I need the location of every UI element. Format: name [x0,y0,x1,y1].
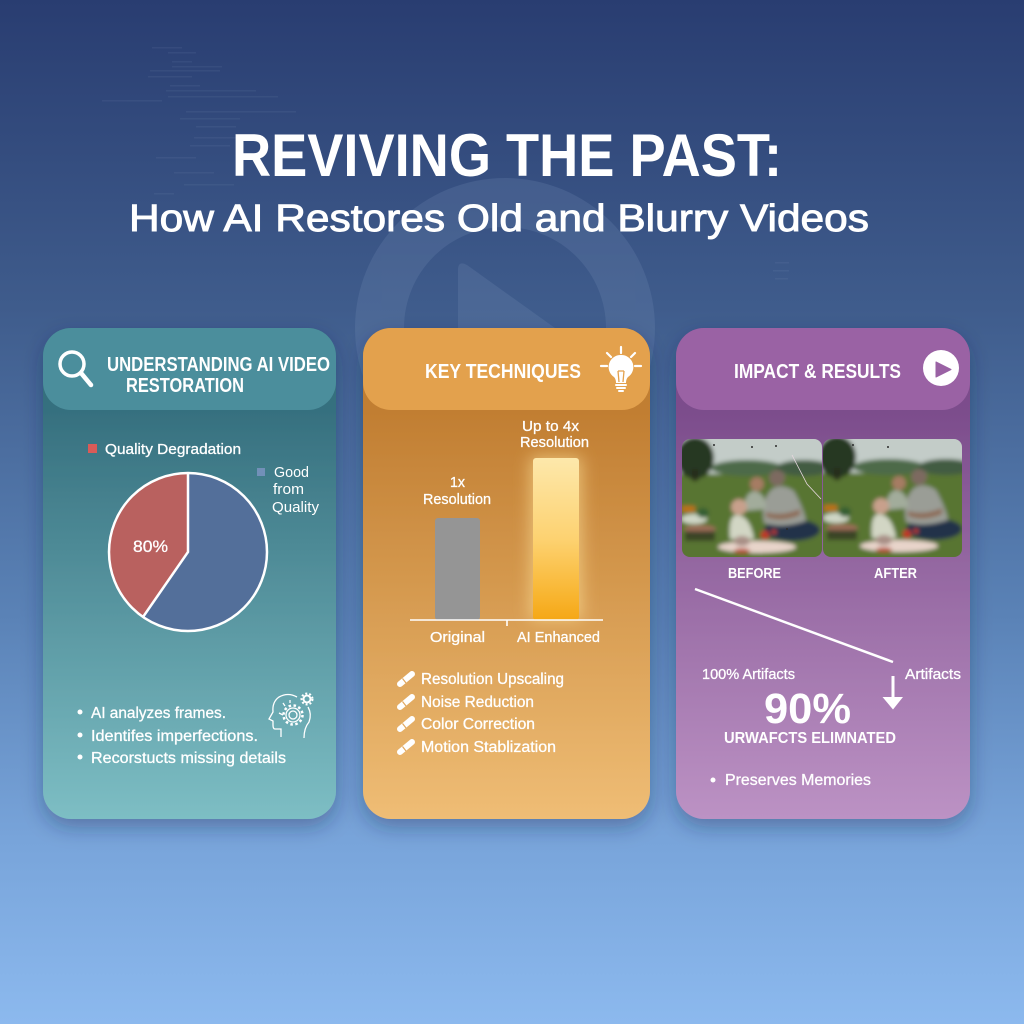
panel header: understanding: RESTORATION [126,375,244,397]
bullet: preserves memories: Preserves Memories [725,772,871,789]
panel header: key techniques [363,328,650,410]
panel: impact and results [674,328,974,819]
watermark: play icon [355,178,655,478]
list: techniques: Noise Reduction [421,694,534,711]
label: 100% artifacts: 100% Artifacts [702,667,795,683]
pie chart: 80% [133,537,168,556]
line chart: artifact decline [695,589,893,662]
photo: before [682,439,822,557]
stat caption: URWAFCTS ELIMNATED [724,730,896,747]
list: techniques: Resolution Upscaling [421,671,564,688]
panel: key techniques [363,328,650,819]
bar chart: resolution: AI Enhanced [517,629,600,646]
panel header: impact: IMPACT & RESULTS [734,360,901,383]
decorative code texture [102,47,789,280]
panel header: understanding: UNDERSTANDING AI VIDEO [107,354,330,376]
bar chart: resolution: Up to 4x [522,418,579,435]
arrow: down [882,676,903,710]
photo: after [823,439,962,557]
list: techniques: Motion Stablization [421,739,556,756]
bar chart: resolution: Original [430,629,485,646]
stat: 90%: 90% [764,685,851,733]
panel header: key techniques: KEY TECHNIQUES [425,360,581,383]
bar chart: resolution: 1x [450,474,465,491]
list: techniques: Color Correction [421,716,535,733]
bullet list: AI steps: Identifes imperfections. [91,728,258,745]
list: techniques [400,671,564,756]
bar chart: resolution [410,418,603,646]
legend: good quality: from [273,481,304,498]
legend: good quality [257,464,320,516]
label: before: BEFORE [728,566,781,582]
icon: head with gears [269,694,312,738]
bar chart: resolution: Resolution [520,434,589,451]
label: artifacts: Artifacts [905,667,961,683]
legend: good quality: Good [274,464,309,481]
legend: good quality: Quality [272,499,320,516]
bullet list: AI steps: AI analyzes frames. [91,705,226,722]
subtitle: How AI Restores Old and Blurry Videos [129,198,869,240]
icon: light bulb [601,347,641,391]
panel: understanding AI video restoration [43,328,336,819]
legend: quality degradation: Quality Degradation [105,441,241,458]
panel header: understanding [43,328,336,410]
icon: brush bullets [400,674,412,752]
icon: play button [923,350,959,386]
icon: magnifying glass [60,352,91,385]
bar chart: resolution: Resolution [423,491,491,508]
panel header: impact [676,328,970,410]
pie chart [109,473,267,631]
title: REVIVING THE PAST: [232,122,782,189]
bullet list: AI steps: Recorstucts missing details [91,750,286,767]
label: after: AFTER [874,566,917,582]
bullet list: AI steps [78,705,286,767]
